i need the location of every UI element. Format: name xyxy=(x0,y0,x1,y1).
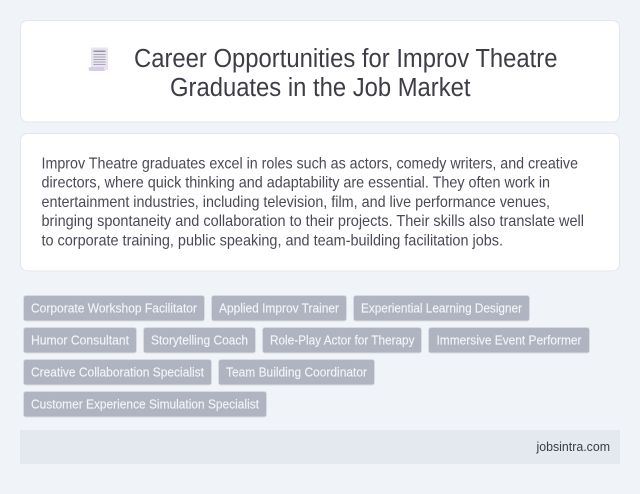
icon: document scroll xyxy=(88,48,108,71)
text block: description paragraph: entertainment industries, including television, film, and live performance venues, xyxy=(42,194,550,211)
tag: Humor Consultant xyxy=(24,328,136,353)
text block: description paragraph: bringing spontaneity and collaboration to their projects. Their skills also translate well xyxy=(42,213,584,230)
text block: description paragraph: Improv Theatre graduates excel in roles such as actors, comedy writers, and creative xyxy=(42,156,578,172)
tag: Humor Consultant: Humor Consultant xyxy=(31,334,130,348)
job tags xyxy=(24,296,590,417)
footer text: source: jobsintra.com xyxy=(536,440,610,454)
tag: Storytelling Coach: Storytelling Coach xyxy=(151,334,248,348)
tag: Creative Collaboration Specialist: Creative Collaboration Specialist xyxy=(31,366,204,380)
text block: description paragraph: to corporate training, public speaking, and team-building facilitation jobs. xyxy=(42,232,503,249)
tag: Role-Play Actor for Therapy: Role-Play Actor for Therapy xyxy=(270,334,415,348)
tag: Immersive Event Performer xyxy=(428,328,590,353)
heading xyxy=(134,45,558,102)
tag: Experiential Learning Designer: Experiential Learning Designer xyxy=(361,302,522,316)
tag: Applied Improv Trainer xyxy=(212,296,346,321)
heading: Graduates in the Job Market xyxy=(170,74,470,102)
tag: Corporate Workshop Facilitator xyxy=(24,296,204,321)
text block: description paragraph: directors, where quick thinking and adaptability are essential. They often work in xyxy=(42,175,550,192)
panel: title card xyxy=(20,20,620,122)
tag: Experiential Learning Designer xyxy=(354,296,530,321)
tag: Role-Play Actor for Therapy xyxy=(262,328,422,353)
tag: Storytelling Coach xyxy=(144,328,256,353)
panel: description xyxy=(20,134,620,271)
tag: Customer Experience Simulation Specialist xyxy=(24,392,266,417)
footer bar xyxy=(20,430,620,464)
tag: Creative Collaboration Specialist xyxy=(24,360,212,385)
tag: Applied Improv Trainer: Applied Improv Trainer xyxy=(219,302,339,316)
tag: Team Building Coordinator: Team Building Coordinator xyxy=(226,366,367,380)
tag: Corporate Workshop Facilitator: Corporate Workshop Facilitator xyxy=(31,302,197,316)
heading: Career Opportunities for Improv Theatre xyxy=(134,45,558,73)
tag: Team Building Coordinator xyxy=(218,360,374,385)
text block: description paragraph xyxy=(42,156,584,249)
tag: Immersive Event Performer: Immersive Event Performer xyxy=(436,334,582,348)
tag: Customer Experience Simulation Specialist: Customer Experience Simulation Specialist xyxy=(31,398,259,412)
